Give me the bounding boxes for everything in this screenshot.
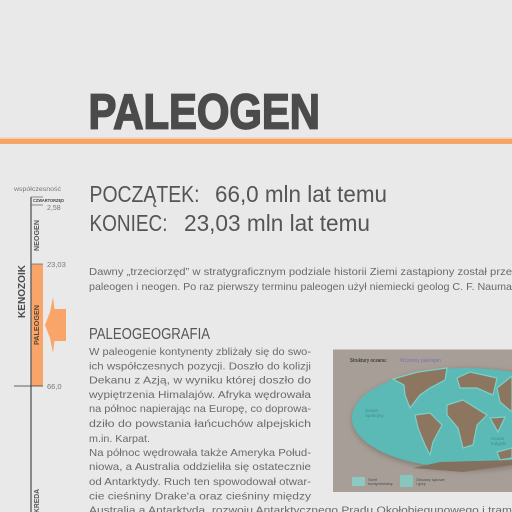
arrow marking paleogene bbox=[45, 297, 66, 353]
geological timeline: 23,03 bbox=[47, 260, 66, 269]
ocean labels: Spokojny bbox=[365, 413, 384, 418]
ocean globe bbox=[352, 368, 512, 468]
paleogene bar bbox=[31, 264, 43, 386]
legend: i góry bbox=[416, 481, 426, 486]
legend: kontynentalny bbox=[368, 481, 393, 486]
paleogeography text: od Antarktydy. Ruch ten spowodował otwar- bbox=[89, 476, 312, 488]
geological timeline: 66,0 bbox=[47, 382, 62, 391]
ocean labels bbox=[365, 408, 506, 446]
globe shadow bbox=[352, 369, 512, 471]
intro text: Dawny „trzeciorzęd” w stratygraficznym podziale historii Ziemi zastąpiony został prze bbox=[89, 266, 512, 278]
start and end dates: KONIEC: bbox=[90, 210, 168, 236]
paleogeography text: wypiętrzenia Himalajów. Afryka wędrowała bbox=[88, 389, 311, 401]
ocean labels: Ocean bbox=[365, 408, 379, 413]
paleogeography text: cie cieśniny Drake'a oraz cieśniny między bbox=[89, 490, 312, 502]
geological timeline: KENOZOIK bbox=[16, 265, 28, 318]
start and end dates: 23,03 mln lat temu bbox=[184, 210, 370, 236]
paleogeography text bbox=[88, 346, 512, 512]
geological timeline bbox=[13, 186, 66, 512]
intro text bbox=[89, 266, 512, 293]
geological timeline: 2,58 bbox=[47, 205, 61, 212]
intro text: paleogen i neogen. Po raz pierwszy terminu paleogen użył niemiecki geolog C. F. Nauma bbox=[89, 281, 512, 293]
paleogeography text: ich współczesnych pozycji. Doszło do kolizji bbox=[89, 360, 311, 372]
rotated labels: NEOGEN bbox=[34, 220, 41, 251]
paleogeography text: Dekanu z Azją, w wyniku której doszło do bbox=[89, 375, 311, 387]
paleogeography text: niowa, a Australia oddzieliła się ostatecznie bbox=[89, 461, 311, 473]
paleogeography text: na północ napierając na Europę, co doprowa- bbox=[89, 403, 312, 415]
title: PALEOGEN bbox=[88, 86, 320, 140]
continents bbox=[393, 368, 512, 460]
map title: Struktury oceanu: bbox=[350, 358, 387, 364]
paleogeography text: m.in. Karpat. bbox=[89, 433, 150, 445]
geological timeline: PALEOGEN bbox=[34, 305, 41, 345]
paleogeography text: W paleogenie kontynenty zbliżały się do swo- bbox=[89, 346, 312, 358]
epoch labels: CZWARTORZĘD bbox=[33, 198, 64, 203]
paleogeographic map bbox=[333, 350, 512, 492]
heading: paleogeografia: PALEOGEOGRAFIA bbox=[89, 326, 211, 343]
legend bbox=[352, 475, 445, 487]
paleogeography text: dziło do powstania łańcuchów alpejskich bbox=[89, 418, 311, 430]
ocean labels: Ocean bbox=[491, 436, 505, 441]
ocean labels: Indyjski bbox=[491, 441, 506, 446]
start and end dates: POCZĄTEK: bbox=[90, 181, 200, 207]
legend: Szelf bbox=[368, 477, 378, 482]
paleogeography text: Na północ wędrowała także Ameryka Połud- bbox=[89, 447, 312, 459]
antarctica bbox=[413, 460, 512, 472]
start and end dates bbox=[90, 181, 387, 236]
orange header rule bbox=[0, 138, 512, 144]
timeline top label: współczesność bbox=[13, 186, 62, 193]
timeline axis bbox=[14, 197, 43, 512]
start and end dates: 66,0 mln lat temu bbox=[215, 181, 387, 207]
legend: Obszary lądowe bbox=[416, 477, 445, 482]
map subtitle: Wczesny paleogen bbox=[400, 358, 441, 364]
